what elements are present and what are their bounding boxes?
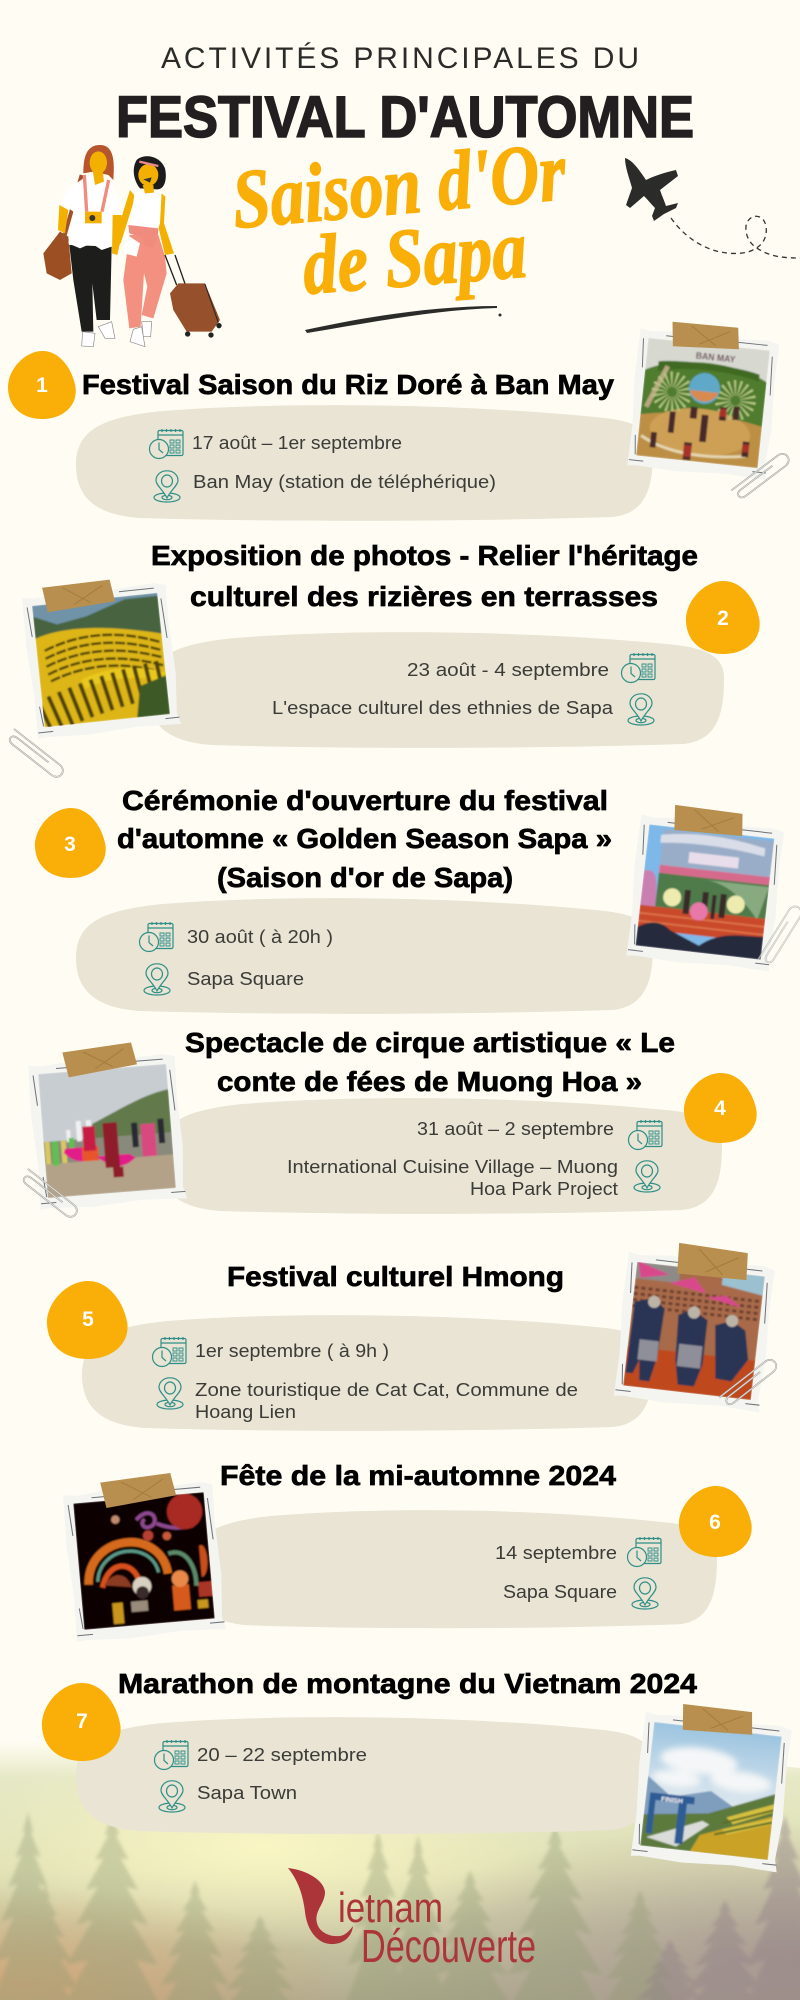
photo 6: lanterns [61,1469,226,1643]
date 4: 31 août – 2 septembre [417,1119,614,1139]
heading 4 [185,1027,675,1097]
heading 4: Spectacle de cirque artistique « Le [185,1027,675,1058]
icon: pin 3 [144,964,170,995]
heading 3: (Saison d'or de Sapa) [217,862,513,893]
background: misty forest [0,1741,800,2000]
place 4 [287,1157,618,1199]
place 5: Hoang Lien [195,1402,296,1422]
number badge 6: 6 [709,1511,721,1534]
traveller 2 [113,156,174,347]
number badge 2 [686,581,760,654]
photo 4: circus dancers [26,1039,187,1211]
icon: calendar 4 [628,1120,662,1150]
date 2: 23 août - 4 septembre [407,660,609,680]
place 5 [195,1380,578,1422]
number badge 4: 4 [714,1097,726,1120]
photo 1: Ban May: BAN MAY [695,350,736,364]
heading 2 [151,540,698,612]
heading 3: Cérémonie d'ouverture du festival [122,785,608,816]
number badge 3 [35,808,106,878]
icon: calendar 6 [628,1537,661,1566]
place 1: Ban May (station de téléphérique) [193,472,496,492]
heading 3: d'automne « Golden Season Sapa » [117,823,612,854]
date 5: 1er septembre ( à 9h ) [195,1341,389,1361]
activity 5 [47,1236,779,1431]
activity 7 [42,1668,795,1873]
activity 2 [6,540,760,780]
icon: calendar 2 [622,653,655,682]
panel: details 5 [82,1315,653,1431]
logo: Vietnam Découverte: ietnam [338,1884,443,1931]
icon: pin 4 [634,1161,660,1192]
photo 7: marathon finish: FINISH [661,1796,683,1805]
date 1: 17 août – 1er septembre [192,433,402,453]
number badge 2: 2 [717,607,729,630]
icon: pin 7 [159,1781,185,1812]
number badge 1 [8,351,76,419]
logo: Vietnam Découverte [288,1868,536,1972]
photo 3: opening ceremony [624,800,787,973]
paperclip 4 [20,1169,79,1220]
activity 3 [35,785,800,1014]
logo: Vietnam Découverte: Découverte [361,1920,536,1972]
heading 6: Fête de la mi-automne 2024 [220,1460,616,1491]
icon: calendar 3 [140,922,173,952]
number badge 5: 5 [82,1308,94,1331]
number badge 7: 7 [76,1710,88,1733]
heading 2: culturel des rizières en terrasses [190,581,658,612]
paperclip 5 [719,1357,779,1408]
date 3: 30 août ( à 20h ) [187,927,333,947]
number badge 7 [42,1683,121,1761]
place 2: L'espace culturel des ethnies de Sapa [272,698,614,718]
paperclip 2 [6,729,65,780]
icon: pin 6 [632,1578,658,1609]
panel: details 3 [76,898,653,1014]
icon: pin 5 [157,1378,183,1409]
title: overline: ACTIVITÉS PRINCIPALES DU [161,42,639,75]
panel: details 2 [148,632,724,748]
date 6: 14 septembre [495,1543,617,1563]
panel: details 7 [76,1717,653,1834]
bag [43,232,72,280]
heading 3 [117,785,612,893]
place 4: International Cuisine Village – Muong [287,1157,618,1177]
photo 2: rice terraces [20,574,181,740]
heading 5: Festival culturel Hmong [227,1261,564,1292]
icon: pin 1 [154,471,180,502]
photo 7: marathon finish [629,1699,795,1873]
heading 7: Marathon de montagne du Vietnam 2024 [118,1668,697,1699]
suitcase [165,255,222,338]
heading 4: conte de fées de Muong Hoa » [217,1066,642,1097]
illustration: two travellers with luggage [43,145,222,347]
heading 1: Festival Saison du Riz Doré à Ban May [82,369,614,400]
title: script line 1: Saison d'Or [229,125,570,247]
heading 2: Exposition de photos - Relier l'héritage [151,540,698,571]
number badge 4 [684,1073,757,1143]
panel: details 1 [76,405,653,521]
traveller 1 [58,145,122,347]
paperclip 1 [731,451,791,501]
dashed flight path [671,216,800,258]
paperclip 3 [758,904,800,966]
place 3: Sapa Square [187,969,304,989]
title: main heading: FESTIVAL D'AUTOMNE [116,85,694,150]
place 7: Sapa Town [197,1783,297,1803]
icon: calendar 1 [150,429,183,458]
icon: calendar 7 [154,1740,188,1770]
panel: details 6 [190,1510,717,1628]
photo 5: Hmong festival [612,1236,778,1413]
place 6: Sapa Square [503,1582,617,1602]
activity 4 [20,1027,757,1220]
brush underline [305,306,502,333]
number badge 6 [679,1486,752,1557]
number badge 3: 3 [64,833,76,856]
place 5: Zone touristique de Cat Cat, Commune de [195,1380,578,1400]
number badge 5 [47,1281,128,1359]
place 4: Hoa Park Project [470,1179,618,1199]
number badge 1: 1 [36,374,48,397]
icon: airplane [625,158,678,221]
photo 1: Ban May [625,317,782,481]
icon: calendar 5 [152,1337,186,1366]
activity 6 [61,1460,752,1643]
date 7: 20 – 22 septembre [197,1745,367,1765]
icon: pin 2 [628,694,654,725]
title: script line 2: de Sapa [299,203,530,313]
panel: details 4 [158,1098,722,1214]
activity 1 [8,317,791,521]
